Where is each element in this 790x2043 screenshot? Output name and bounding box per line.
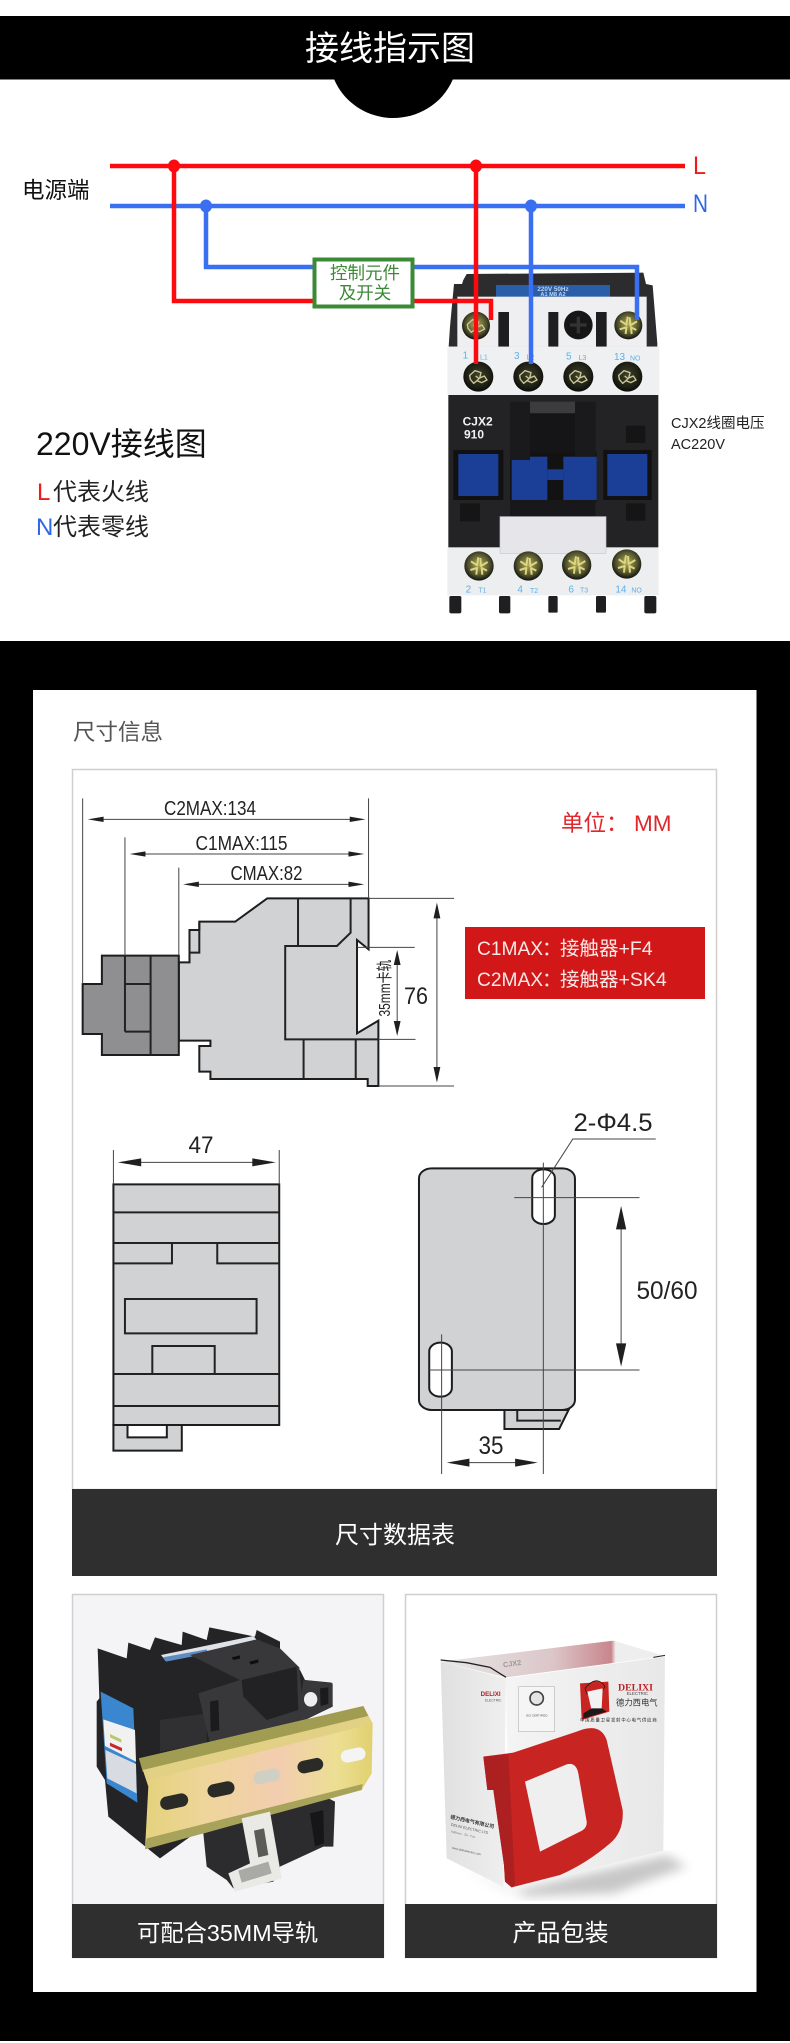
photo: contactor front view: 3 (514, 351, 520, 362)
photo: contactor front view: 14 (615, 584, 627, 595)
dimension labels: side view: C1MAX:115 (196, 833, 288, 855)
labels: rear view dimensions (478, 1109, 698, 1460)
photo: contactor front view: 2 (466, 585, 472, 596)
photo: contactor front view: NO (631, 587, 642, 594)
drawing: side view with dimension lines (83, 798, 454, 1086)
caption bar: dimension table: 尺寸数据表 (335, 1522, 455, 1549)
photo: product box (441, 1641, 687, 1897)
text: 220V wiring title: 220V接线图 (36, 426, 207, 462)
photo: product box: 德力西电气有限公司 (450, 1813, 495, 1830)
photo: product box: DELIXI ELECTRIC LTD (450, 1823, 489, 1835)
drawing: rear view with mounting holes (419, 1139, 656, 1474)
heading: dimensions info: 尺寸信息 (73, 720, 163, 745)
legend: N neutral wire: 代表零线 (53, 514, 149, 541)
dimension labels: side view: 76 (404, 983, 428, 1010)
photo: product box: ELECTRIC (627, 1691, 648, 1696)
photo: contactor front view: 13 (614, 352, 626, 363)
label: coil voltage (671, 415, 764, 453)
callout: red notes: C2MAX (477, 969, 543, 991)
wiring diagram: live and neutral lines (110, 160, 685, 364)
label: power source end: 电源端 (22, 178, 90, 203)
photo: contactor front view: NO (630, 356, 641, 363)
legend: L live wire: L (37, 479, 50, 506)
photo: product box: DELIXI (481, 1691, 501, 1698)
label: 35mm rail: 35mm卡轨 (376, 960, 394, 1016)
photo: contactor front view: T3 (580, 588, 588, 595)
photo: contactor front view: L2 (527, 354, 535, 361)
label: width 47: 47 (188, 1132, 214, 1159)
caption bar: packaging (405, 1904, 717, 1958)
photo: product box: ELECTRIC (485, 1699, 502, 1703)
callout: red notes: 接触器+F4 (560, 938, 653, 960)
photo: product box: 中国质量卫星发射中心电气供应商 (580, 1717, 657, 1724)
dimension labels: side view: CMAX:82 (230, 863, 302, 885)
photo: product box: www.delixielectric.com (451, 1846, 482, 1856)
photo: contactor front view (447, 273, 659, 613)
photo: contactor front view: L1 (480, 354, 488, 361)
caption bar: DIN rail (72, 1904, 384, 1958)
callout: red notes: 接触器+SK4 (560, 969, 667, 991)
photo: contactor front view: 6 (568, 585, 574, 596)
control element and switch box: 控制元件 (330, 263, 400, 283)
panel: packaging photo (406, 1594, 716, 1958)
dimension labels: side view: C2MAX:134 (164, 798, 256, 820)
panel: dimensions white card (33, 690, 756, 1992)
photo: product box: DELIXI (618, 1682, 654, 1692)
label: line N: N (693, 190, 708, 218)
photo: product box: CJX2 (502, 1658, 522, 1669)
label: line L: L (693, 152, 706, 180)
caption bar: dimension table (72, 1489, 717, 1576)
photo: contactor front view: T2 (530, 588, 538, 595)
photo: contactor front view: L3 (579, 355, 587, 362)
photo: product box: Address · Tel · Fax (450, 1829, 476, 1839)
heading band: wiring diagram (0, 16, 790, 118)
label: coil voltage: CJX2线圈电压 (671, 415, 764, 432)
label: unit MM: MM (634, 811, 672, 836)
photo: contactor on DIN rail (97, 1627, 373, 1892)
photo: product box: ISO CERTIFIED (526, 1714, 548, 1718)
labels: rear view dimensions: 50/60 (636, 1277, 698, 1305)
heading band: wiring diagram: 接线指示图 (305, 30, 475, 68)
panel: black frame (0, 641, 790, 2041)
photo: contactor front view: 5 (566, 351, 572, 362)
callout: red notes (465, 927, 705, 999)
caption bar: DIN rail: 可配合35MM导轨 (137, 1920, 318, 1946)
callout: red notes: ： (542, 938, 562, 960)
drawing: front view width 47 (113, 1150, 279, 1451)
callout: red notes: ： (542, 969, 562, 991)
photo: contactor front view: CJX2 (463, 415, 493, 429)
photo: contactor front view: 220V 50Hz (537, 286, 569, 293)
control element and switch box: 及开关 (339, 283, 391, 303)
photo: contactor front view: T1 (478, 587, 487, 594)
photo: contactor front view: A1 M8 A2 (540, 292, 566, 298)
panel: DIN rail photo (72, 1594, 384, 1958)
legend: L live wire: 代表火线 (53, 479, 149, 506)
callout: red notes: C1MAX (477, 938, 543, 960)
labels: rear view dimensions: 2-Φ4.5 (574, 1109, 652, 1137)
labels: rear view dimensions: 35 (478, 1432, 504, 1460)
legend: N neutral wire: N (36, 514, 53, 541)
panel: dimension drawings (72, 770, 716, 1490)
label: coil voltage: AC220V (671, 437, 725, 453)
dimension labels: side view (164, 798, 428, 1010)
photo: contactor front view: 1 (463, 350, 469, 361)
photo: contactor front view: 910 (464, 428, 484, 442)
photo: contactor front view: 4 (517, 585, 523, 596)
control element and switch box (314, 260, 412, 306)
photo: product box: 德力西电气 (616, 1697, 658, 1707)
label: unit MM: 单位： (561, 811, 629, 836)
caption bar: packaging: 产品包装 (512, 1920, 608, 1947)
